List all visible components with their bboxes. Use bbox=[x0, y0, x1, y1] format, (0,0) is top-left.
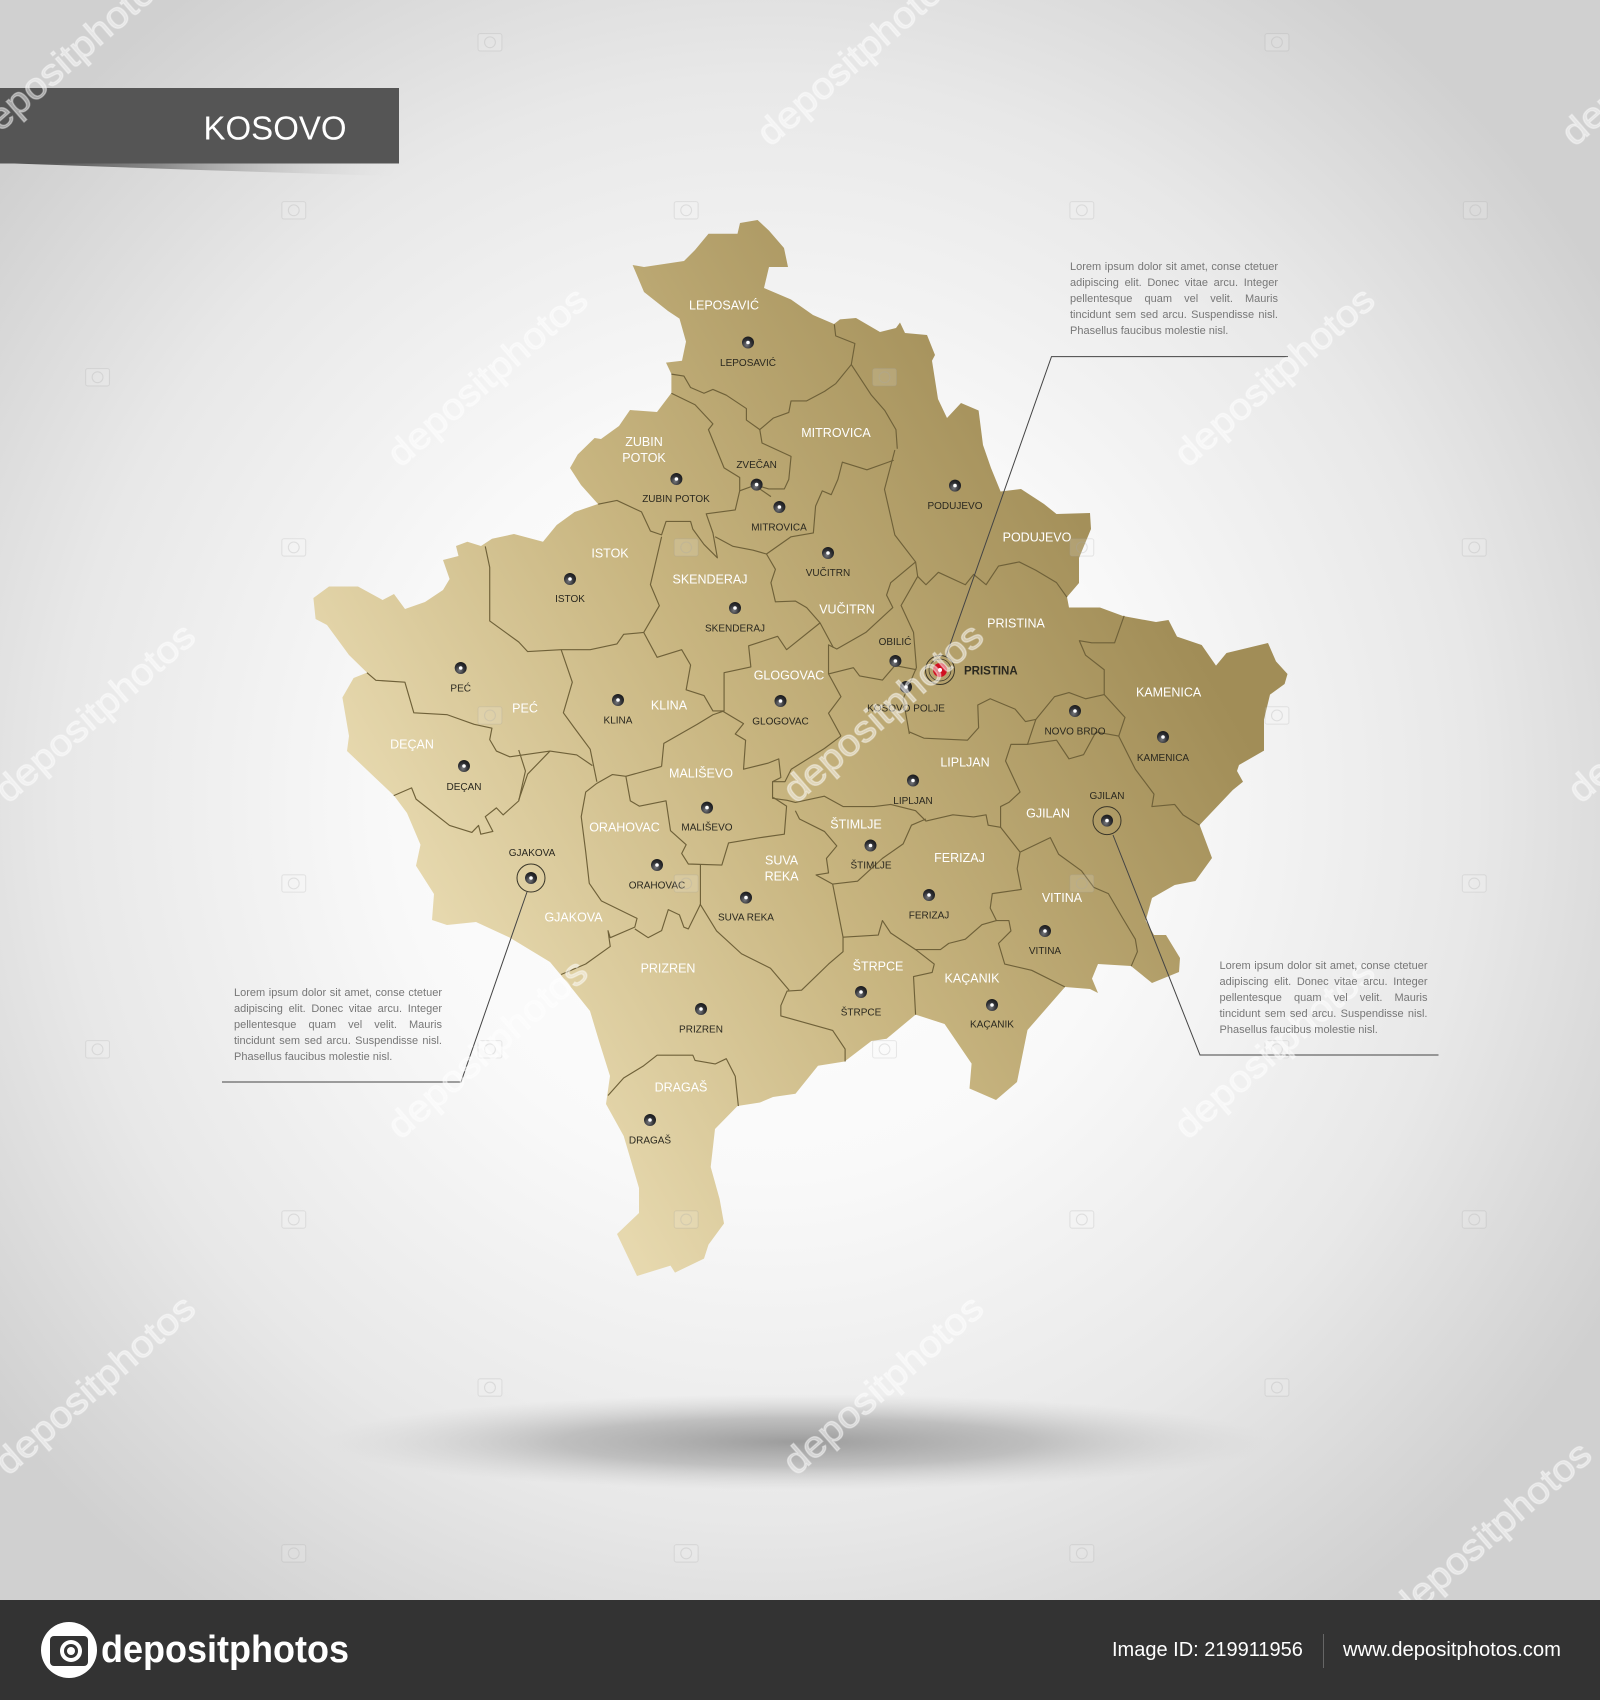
region names: ZUBIN bbox=[625, 435, 663, 449]
region names: PRIZREN bbox=[641, 962, 695, 976]
leader line: upper right bbox=[946, 357, 1288, 656]
city: Dragaš bbox=[629, 1114, 671, 1146]
text block: lower right: tincidunt sem sed arcu. Suspendisse nisl. bbox=[1220, 1008, 1428, 1020]
city: Klina bbox=[604, 694, 633, 726]
city: Gjilan with ring bbox=[1089, 791, 1125, 835]
city: Zvečan bbox=[736, 458, 777, 491]
city markers bbox=[446, 336, 1189, 1146]
city: Ferizaj: FERIZAJ bbox=[909, 910, 949, 922]
region names: PRISTINA bbox=[987, 616, 1045, 630]
region names: KAÇANIK bbox=[945, 972, 1000, 986]
region names: GJAKOVA bbox=[544, 910, 603, 924]
footer logo icon bbox=[41, 1622, 97, 1678]
text block: lower right: adipiscing elit. Donec vitae arcu. Integer bbox=[1220, 976, 1428, 988]
region names: SUVA bbox=[765, 854, 799, 868]
city: Orahovac bbox=[629, 859, 685, 892]
region names: MITROVICA bbox=[801, 426, 871, 440]
watermark text: depositphotos bbox=[1383, 1433, 1599, 1629]
region names: VUČITRN bbox=[819, 602, 875, 616]
city: Štrpce bbox=[841, 986, 882, 1018]
city: Podujevo bbox=[927, 480, 983, 512]
title bar bbox=[0, 88, 399, 164]
city: Vučitrn: VUČITRN bbox=[806, 566, 850, 579]
city: Glogovac bbox=[752, 695, 809, 728]
city: Kamenica: KAMENICA bbox=[1137, 753, 1189, 764]
city: Orahovac: ORAHOVAC bbox=[629, 880, 685, 892]
region names: SKENDERAJ bbox=[672, 572, 748, 586]
region names: KAMENICA bbox=[1136, 686, 1202, 700]
city: Istok: ISTOK bbox=[555, 594, 585, 605]
city: Klina: KLINA bbox=[604, 716, 633, 726]
city: Kaçanik: KAÇANIK bbox=[970, 1020, 1014, 1030]
leader line: lower left bbox=[222, 892, 527, 1082]
city: Štrpce: ŠTRPCE bbox=[841, 1006, 882, 1018]
city: Mitrovica: MITROVICA bbox=[751, 522, 807, 534]
city: Leposavić bbox=[720, 336, 776, 369]
region names: ORAHOVAC bbox=[589, 820, 660, 834]
text block: upper right: adipiscing elit. Donec vitae arcu. Integer bbox=[1070, 277, 1278, 289]
watermark text: depositphotos bbox=[774, 1287, 991, 1483]
text block: upper right: tincidunt sem sed arcu. Suspendisse nisl. bbox=[1070, 309, 1278, 321]
text block: upper right: Phasellus faucibus molestie nisl. bbox=[1070, 325, 1228, 337]
city: Peć: PEĆ bbox=[450, 682, 471, 694]
footer divider bbox=[1323, 1634, 1324, 1668]
region names: REKA bbox=[765, 870, 799, 884]
watermark text: depositphotos bbox=[1166, 279, 1383, 474]
floating map shadow bbox=[322, 1394, 1272, 1490]
text block: upper right bbox=[1070, 261, 1278, 337]
image id: Image ID: 219911956 bbox=[1112, 1639, 1303, 1661]
text block: lower right bbox=[1220, 960, 1428, 1036]
map of Kosovo bbox=[313, 220, 1287, 1276]
text block: lower left: adipiscing elit. Donec vitae arcu. Integer bbox=[234, 1002, 442, 1014]
footer brand name: depositphotos bbox=[101, 1629, 349, 1671]
city: Prizren bbox=[679, 1003, 723, 1036]
city: Dragaš: DRAGAŠ bbox=[629, 1134, 671, 1146]
city: Zubin Potok bbox=[642, 473, 710, 505]
watermark text: depositphotos bbox=[379, 951, 596, 1147]
text block: lower right: pellentesque quam vel velit. Mauris bbox=[1220, 992, 1428, 1004]
city: Štimlje bbox=[850, 840, 892, 872]
text block: lower left: Lorem ipsum dolor sit amet, conse ctetuer bbox=[234, 986, 442, 998]
title shadow tail bbox=[0, 163, 399, 176]
city: Suva Reka bbox=[718, 892, 774, 924]
text block: lower left bbox=[234, 986, 442, 1062]
text block: upper right: Lorem ipsum dolor sit amet, conse ctetuer bbox=[1070, 261, 1278, 273]
region names: GLOGOVAC bbox=[754, 668, 824, 682]
city: Skenderaj: SKENDERAJ bbox=[705, 624, 765, 634]
region names: GJILAN bbox=[1026, 806, 1070, 820]
city: Vučitrn bbox=[806, 547, 850, 579]
city: Glogovac: GLOGOVAC bbox=[752, 716, 809, 728]
city: Kosovo Polje: KOSOVO POLJE bbox=[867, 704, 945, 714]
region names: DEÇAN bbox=[390, 738, 434, 752]
text block: lower left: tincidunt sem sed arcu. Suspendisse nisl. bbox=[234, 1034, 442, 1046]
region names: PEĆ bbox=[512, 700, 538, 716]
region names bbox=[390, 298, 1202, 1094]
watermark text: depositphotos bbox=[379, 279, 596, 474]
capital marker: Pristina: PRISTINA bbox=[964, 666, 1018, 678]
region names: KLINA bbox=[651, 698, 688, 712]
region names: ŠTIMLJE bbox=[830, 816, 882, 832]
city: Mališevo bbox=[681, 802, 733, 834]
city: Deçan bbox=[446, 760, 482, 793]
city: Prizren: PRIZREN bbox=[679, 1024, 723, 1036]
region names: DRAGAŠ bbox=[655, 1080, 707, 1094]
city: Gjakova with ring bbox=[509, 848, 556, 892]
text block: lower right: Lorem ipsum dolor sit amet, conse ctetuer bbox=[1220, 960, 1428, 972]
text block: lower right: Phasellus faucibus molestie nisl. bbox=[1220, 1024, 1378, 1036]
region names: POTOK bbox=[622, 451, 666, 465]
city: Obilić: OBILIĆ bbox=[879, 635, 911, 648]
city: Štimlje: ŠTIMLJE bbox=[850, 858, 892, 872]
capital marker: Pristina bbox=[926, 656, 1018, 684]
city: Zubin Potok: ZUBIN POTOK bbox=[642, 494, 710, 505]
region names: LIPLJAN bbox=[940, 756, 990, 770]
city: Vitina: VITINA bbox=[1029, 946, 1061, 957]
region names: PODUJEVO bbox=[1003, 530, 1072, 544]
text block: upper right: pellentesque quam vel velit. Mauris bbox=[1070, 293, 1278, 305]
watermark camera icons bbox=[86, 34, 1487, 1562]
city: Leposavić: LEPOSAVIĆ bbox=[720, 356, 776, 369]
city: Podujevo: PODUJEVO bbox=[927, 501, 983, 512]
region names: VITINA bbox=[1042, 891, 1083, 905]
text block: lower left: Phasellus faucibus molestie nisl. bbox=[234, 1050, 392, 1062]
city: Suva Reka: SUVA REKA bbox=[718, 912, 774, 924]
district boundaries bbox=[367, 324, 1200, 1106]
city: Obilić bbox=[879, 635, 911, 667]
country outline bbox=[313, 220, 1287, 1276]
footer bar bbox=[0, 1600, 1600, 1700]
city: Lipljan: LIPLJAN bbox=[893, 796, 933, 807]
region names: LEPOSAVIĆ bbox=[689, 298, 759, 312]
city: Istok bbox=[555, 573, 585, 605]
city: Skenderaj bbox=[705, 602, 765, 634]
city: Ferizaj bbox=[909, 889, 949, 922]
city: Novo Brdo bbox=[1044, 705, 1106, 738]
city: Gjakova with ring: GJAKOVA bbox=[509, 848, 556, 859]
city: Kaçanik bbox=[970, 999, 1014, 1030]
city: Deçan: DEÇAN bbox=[446, 782, 482, 793]
city: Mitrovica bbox=[751, 501, 807, 534]
region names: ISTOK bbox=[591, 546, 629, 560]
city: Kamenica bbox=[1137, 731, 1189, 764]
city: Novo Brdo: NOVO BRDO bbox=[1044, 726, 1106, 738]
city: Zvečan: ZVEČAN bbox=[736, 458, 777, 471]
leader line: lower right bbox=[1113, 835, 1438, 1055]
watermark text: depositphotos bbox=[774, 615, 991, 810]
text block: lower left: pellentesque quam vel velit. Mauris bbox=[234, 1018, 442, 1030]
city: Peć bbox=[450, 662, 471, 694]
region names: FERIZAJ bbox=[934, 851, 985, 865]
region names: MALIŠEVO bbox=[669, 766, 733, 780]
title bar: KOSOVO bbox=[204, 110, 347, 146]
city: Lipljan bbox=[893, 774, 933, 807]
city: Gjilan with ring: GJILAN bbox=[1089, 791, 1125, 802]
footer url: www.depositphotos.com bbox=[1342, 1639, 1561, 1661]
city: Mališevo: MALIŠEVO bbox=[681, 820, 733, 834]
watermark text: depositphotos bbox=[1166, 951, 1383, 1147]
city: Vitina bbox=[1029, 925, 1061, 957]
city: Kosovo Polje bbox=[867, 681, 945, 714]
region names: ŠTRPCE bbox=[853, 958, 903, 974]
